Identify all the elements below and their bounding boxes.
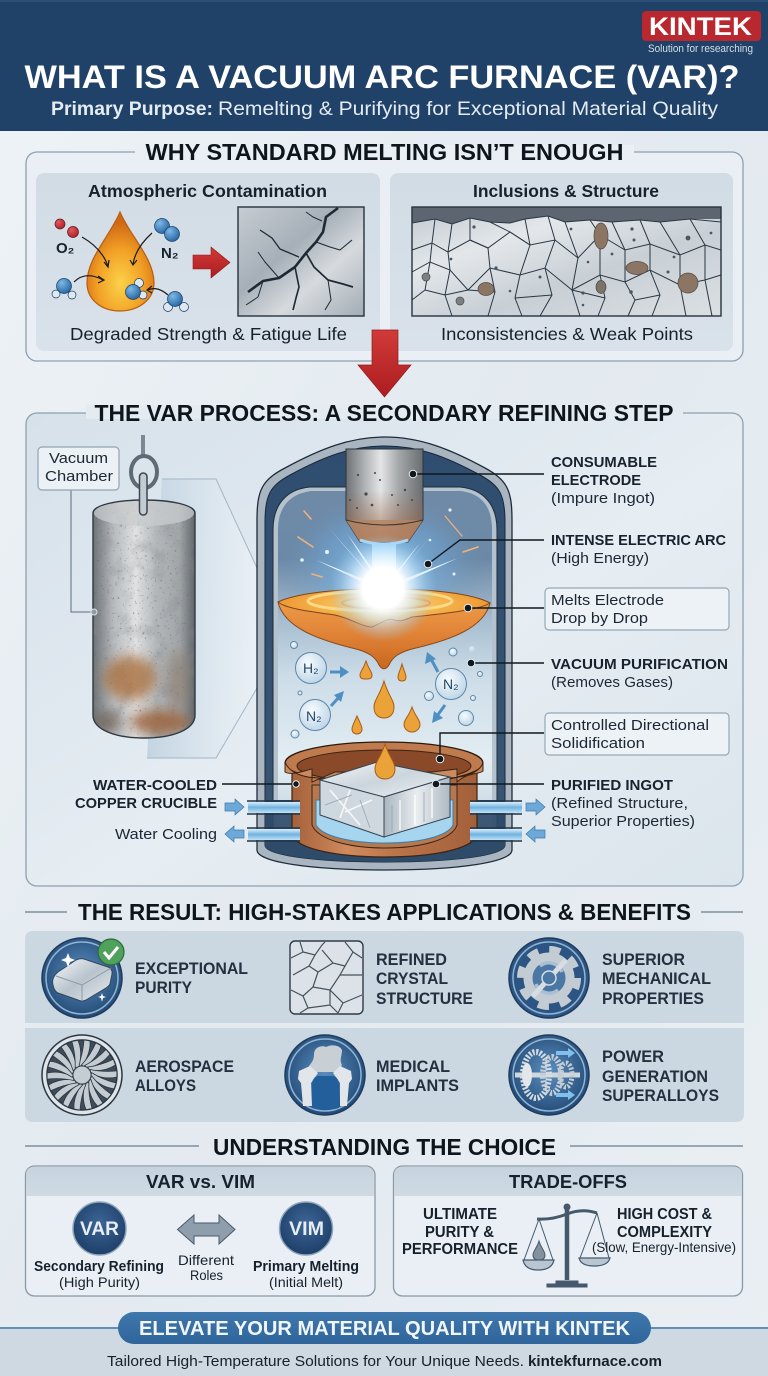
panel: results and applications <box>25 931 744 1122</box>
panel: trade-offs: TRADE-OFFS <box>509 1172 627 1192</box>
icon: molten droplet with gas molecules <box>52 212 188 312</box>
text: power generation superalloys <box>602 1047 719 1105</box>
leader lines <box>222 474 544 784</box>
arrow: red right arrow <box>193 247 230 278</box>
text: high cost and complexity: COMPLEXITY <box>617 1224 713 1241</box>
icon: aerospace turbine <box>42 1035 122 1115</box>
gas bubbles and arrows: H₂ <box>303 660 319 676</box>
KINTEK logo: Solution for researching <box>648 43 753 55</box>
text: ultimate purity and performance: PERFORMANCE <box>402 1241 518 1258</box>
heading: why standard melting: WHY STANDARD MELTING ISN’T ENOUGH <box>146 139 624 165</box>
text: superior mechanical properties <box>602 950 711 1008</box>
KINTEK logo: KINTEK <box>649 13 752 41</box>
label: purified ingot: (Refined Structure, <box>551 795 688 812</box>
sub-panel: inclusions and structure: Inclusions & Structure <box>473 181 659 201</box>
zoom callout wedge <box>147 479 257 758</box>
arrows: water flow <box>225 799 545 842</box>
text: refined crystal structure: REFINED <box>376 950 447 969</box>
label: intense electric arc: INTENSE ELECTRIC ARC <box>551 532 726 549</box>
label: water-cooled copper crucible <box>75 777 217 812</box>
label box: melts electrode: Melts Electrode <box>551 592 664 609</box>
text: ultimate purity and performance <box>402 1206 518 1258</box>
text: superior mechanical properties: MECHANICAL <box>602 969 711 988</box>
gas bubbles and arrows <box>290 642 482 738</box>
subtitle <box>51 98 718 120</box>
icon: VIM badge <box>280 1202 332 1255</box>
label: purified ingot: PURIFIED INGOT <box>551 777 673 794</box>
label: vacuum purification: VACUUM PURIFICATION <box>551 656 728 673</box>
text: high cost and complexity: HIGH COST & <box>617 1206 712 1223</box>
subtitle: Remelting & Purifying for Exceptional Material Quality <box>218 98 718 120</box>
icon: balance scale <box>523 1204 610 1287</box>
text: ultimate purity and performance: ULTIMATE <box>423 1206 497 1223</box>
text: aerospace alloys <box>135 1057 234 1095</box>
molten pool <box>278 589 490 669</box>
label: water-cooled copper crucible: COPPER CRUCIBLE <box>75 795 217 812</box>
text: aerospace alloys: AEROSPACE <box>135 1057 234 1076</box>
text: primary melting: Primary Melting <box>253 1259 359 1275</box>
footer band <box>0 1312 768 1376</box>
purified ingot <box>320 762 450 837</box>
icon: refined crystal structure <box>290 941 363 1014</box>
label box: melts electrode <box>545 588 729 630</box>
label: intense electric arc: (High Energy) <box>551 550 649 567</box>
label box: directional solidification: Controlled Directional <box>551 717 709 734</box>
caption: inconsistencies: Inconsistencies & Weak Points <box>441 324 693 344</box>
heading: the result: THE RESULT: HIGH-STAKES APPLICATIONS & BENEFITS <box>78 899 691 925</box>
label: consumable electrode <box>551 454 657 507</box>
panel: VAR vs VIM <box>26 1166 375 1296</box>
panel: the VAR process <box>26 400 743 886</box>
sub-panel: inclusions and structure <box>390 173 733 351</box>
heading: understanding the choice: UNDERSTANDING THE CHOICE <box>213 1134 556 1160</box>
call-to-action pill <box>118 1312 651 1344</box>
label: consumable electrode: ELECTRODE <box>551 472 641 489</box>
droplet on ingot <box>375 744 395 779</box>
text: refined crystal structure: STRUCTURE <box>376 989 473 1008</box>
label: vacuum chamber: Chamber <box>45 468 113 485</box>
illustration: consumable electrode ingot <box>93 435 195 738</box>
panel: why standard melting isn't enough <box>26 139 743 361</box>
arrow: different roles double arrow <box>178 1215 235 1244</box>
heading: the VAR process: THE VAR PROCESS: A SECONDARY REFINING STEP <box>94 400 674 426</box>
arrow: large red down arrow <box>358 330 411 397</box>
label: purified ingot: Superior Properties) <box>551 813 695 830</box>
sub-panel: atmospheric contamination: Atmospheric Contamination <box>88 181 327 201</box>
text: medical implants: MEDICAL <box>376 1057 450 1076</box>
text: different roles: Different <box>178 1252 234 1268</box>
image: grain structure with inclusions <box>412 207 721 316</box>
text: high cost and complexity <box>592 1206 736 1255</box>
text: primary melting <box>253 1259 359 1290</box>
label box: directional solidification <box>545 713 729 755</box>
text: ultimate purity and performance: PURITY & <box>425 1224 494 1241</box>
icon: medical implants <box>285 1035 365 1115</box>
label: consumable electrode: CONSUMABLE <box>551 454 657 471</box>
text: medical implants <box>376 1057 459 1095</box>
icon: molten droplet with gas molecules: O₂ <box>56 240 74 257</box>
text: high cost and complexity: (Slow, Energy-Intensive) <box>592 1239 736 1255</box>
arc and sparks <box>297 508 479 592</box>
label: intense electric arc <box>551 532 726 567</box>
call-to-action pill: ELEVATE YOUR MATERIAL QUALITY WITH KINTEK <box>139 1318 631 1340</box>
footer tagline: Tailored High-Temperature Solutions for Your Unique Needs. <box>107 1354 524 1370</box>
icon: molten droplet with gas molecules: N₂ <box>161 245 178 262</box>
text: different roles: Roles <box>190 1267 223 1283</box>
label: consumable electrode: (Impure Ingot) <box>551 490 655 507</box>
text: exceptional purity: PURITY <box>135 978 193 997</box>
footer tagline: kintekfurnace.com <box>528 1354 662 1370</box>
text: secondary refining: (High Purity) <box>59 1274 140 1290</box>
panel: trade-offs <box>394 1166 742 1296</box>
icon: VAR badge <box>73 1202 126 1255</box>
label: water cooling: Water Cooling <box>115 826 217 843</box>
icon: exceptional purity <box>42 938 124 1018</box>
header band <box>0 0 768 131</box>
label box: melts electrode: Drop by Drop <box>551 610 648 627</box>
text: aerospace alloys: ALLOYS <box>135 1076 196 1095</box>
water-cooled copper crucible <box>265 742 505 862</box>
image: cracked metal <box>238 207 364 316</box>
text: primary melting: (Initial Melt) <box>269 1274 343 1290</box>
text: different roles <box>178 1252 234 1283</box>
label: vacuum purification <box>551 656 728 691</box>
label: purified ingot <box>551 777 695 830</box>
label: vacuum chamber <box>38 447 119 615</box>
KINTEK logo <box>642 11 761 55</box>
arc glow <box>329 534 437 642</box>
falling droplets <box>352 661 420 734</box>
illustration: furnace chamber <box>247 437 522 870</box>
text: secondary refining: Secondary Refining <box>34 1259 164 1275</box>
text: superior mechanical properties: PROPERTIES <box>602 989 704 1008</box>
label: vacuum chamber: Vacuum <box>49 450 108 467</box>
text: exceptional purity: EXCEPTIONAL <box>135 959 248 978</box>
electrode tip <box>346 449 423 544</box>
cooling pipes <box>247 801 522 841</box>
text: medical implants: IMPLANTS <box>376 1076 459 1095</box>
label: vacuum purification: (Removes Gases) <box>551 674 673 691</box>
icon: superior mechanical properties <box>509 938 589 1018</box>
text: exceptional purity <box>135 959 248 997</box>
caption: degraded strength: Degraded Strength & Fatigue Life <box>70 324 347 344</box>
text: superior mechanical properties: SUPERIOR <box>602 950 685 969</box>
text: power generation superalloys: GENERATION <box>602 1067 708 1086</box>
icon: power generation turbine <box>509 1035 589 1115</box>
subtitle: Primary Purpose: <box>51 98 213 120</box>
text: refined crystal structure: CRYSTAL <box>376 969 448 988</box>
label: water-cooled copper crucible: WATER-COOLED <box>93 777 217 794</box>
gas bubbles and arrows: N₂ <box>306 708 322 724</box>
main title: WHAT IS A VACUUM ARC FURNACE (VAR)? <box>24 59 740 95</box>
panel: VAR vs VIM: VAR vs. VIM <box>146 1172 255 1192</box>
text: refined crystal structure <box>376 950 473 1008</box>
label box: directional solidification: Solidification <box>551 735 645 752</box>
sub-panel: atmospheric contamination <box>36 173 380 351</box>
text: secondary refining <box>34 1259 164 1290</box>
gas bubbles and arrows: N₂ <box>443 676 459 692</box>
icon: VIM badge: VIM <box>289 1219 324 1240</box>
text: power generation superalloys: POWER <box>602 1047 664 1066</box>
text: power generation superalloys: SUPERALLOYS <box>602 1086 719 1105</box>
icon: VAR badge: VAR <box>80 1219 119 1240</box>
